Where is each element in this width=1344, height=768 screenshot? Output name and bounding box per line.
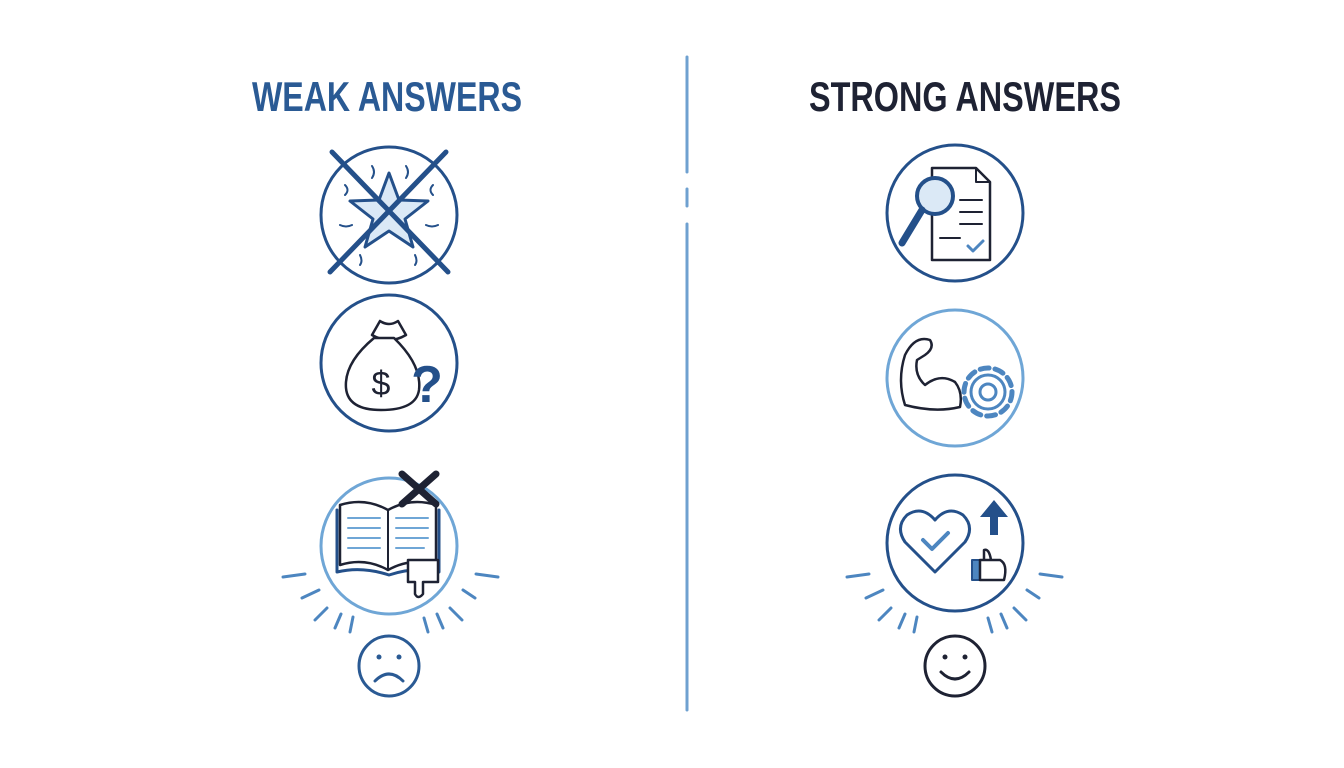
title: strong answers: STRONG ANSWERS bbox=[809, 73, 1121, 120]
divider bbox=[686, 57, 688, 710]
icon: sad face bbox=[359, 636, 419, 696]
icon: money bag question: ? bbox=[411, 356, 443, 414]
icon: happy face bbox=[925, 636, 985, 696]
rays left bbox=[283, 574, 498, 632]
rays right bbox=[847, 574, 1062, 632]
icon: heart thumbs up bbox=[887, 475, 1023, 611]
icon: crossed star bbox=[321, 147, 457, 283]
icon: magnifier document bbox=[887, 145, 1023, 281]
icon: money bag question bbox=[321, 295, 457, 431]
icon: money bag question: $ bbox=[372, 365, 391, 403]
title: weak answers: WEAK ANSWERS bbox=[252, 73, 522, 120]
icon: muscle gear bbox=[887, 310, 1023, 446]
icon: book thumbs down bbox=[321, 474, 457, 614]
